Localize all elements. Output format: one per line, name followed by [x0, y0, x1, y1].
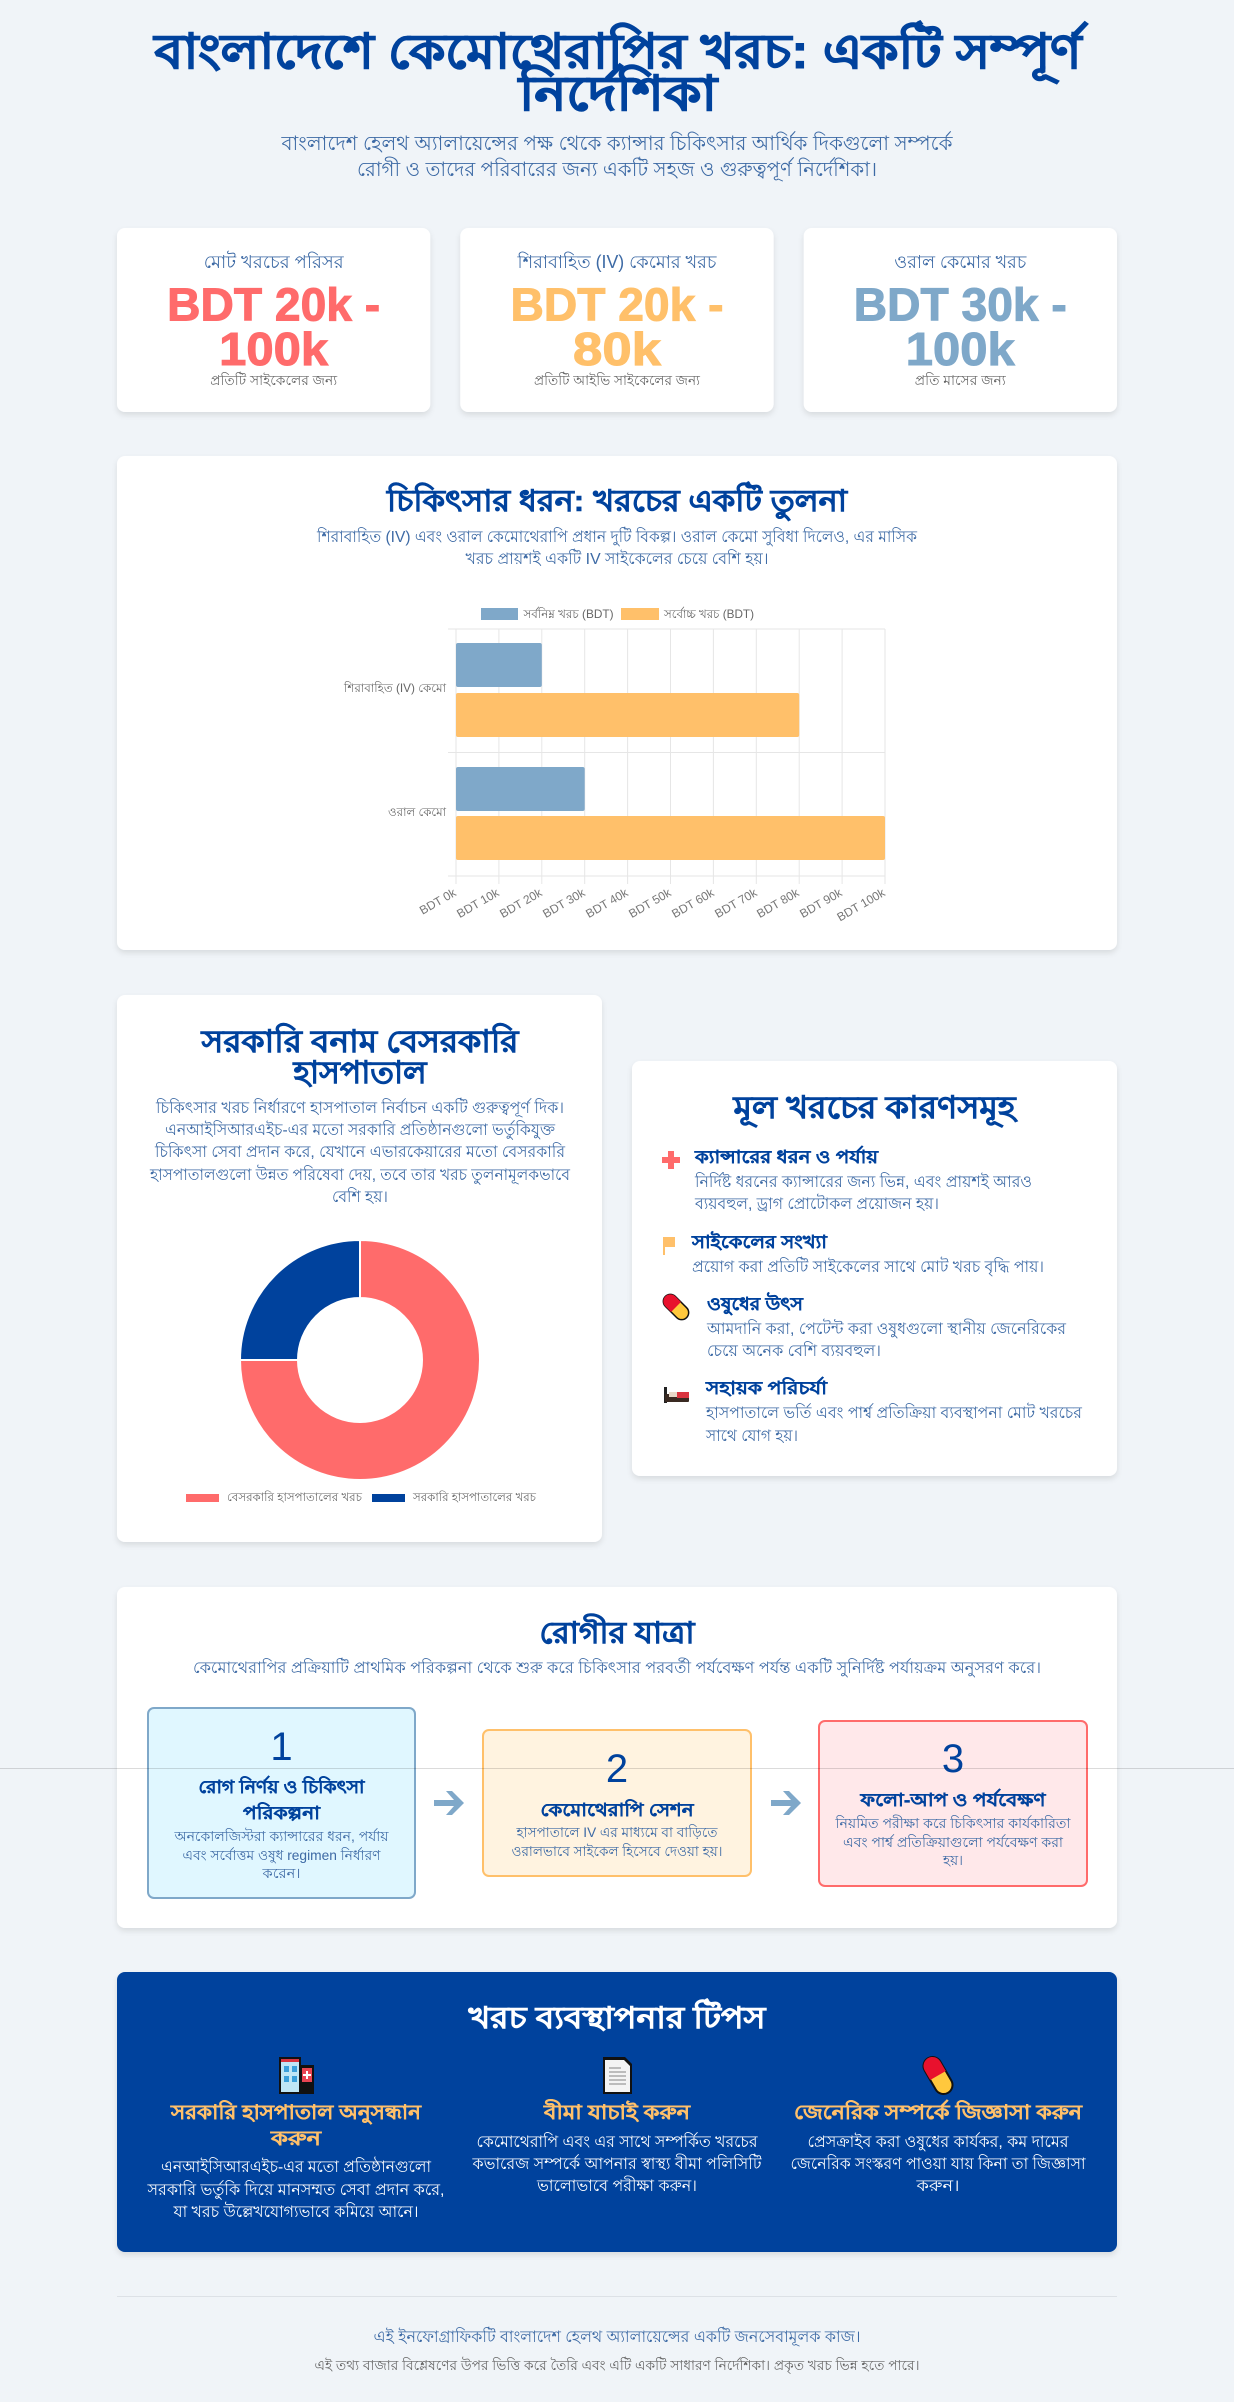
bar chart: [343, 607, 888, 924]
panel: IV cost stat: BDT 20k -: [510, 278, 724, 330]
item: drug source: আমদানি করা, পেটেন্ট করা ওষুধগুলো স্থানীয় জেনেরিকের: [706, 1319, 1067, 1338]
tip: insurance: কেমোথেরাপি এবং এর সাথে সম্পর্কিত খরচের: [476, 2132, 759, 2151]
tip: insurance: [472, 2057, 762, 2195]
step 3: 3: [942, 1737, 964, 1781]
text: hospital intro: বেশি হয়।: [332, 1187, 388, 1206]
heading: public vs private: সরকারি বনাম বেসরকারি: [200, 1022, 520, 1059]
tip: public hospital: যা খরচ উল্লেখযোগ্যভাবে কমিয়ে আনে।: [173, 2202, 418, 2221]
heading: tips: খরচ ব্যবস্থাপনার টিপস: [467, 1998, 767, 2035]
panel: key cost drivers: [632, 1061, 1117, 1476]
axis labels: BDT 90k: [797, 885, 845, 921]
step 1: রোগ নির্ণয় ও চিকিৎসা: [198, 1775, 365, 1797]
text: comparison intro: শিরাবাহিত (IV) এবং ওরাল কেমোথেরাপি প্রধান দুটি বিকল্প। ওরাল কেমো সুবিধা দিলেও, এর মাসিক: [316, 527, 918, 546]
step 1: পরিকল্পনা: [243, 1802, 321, 1823]
step 1: এবং সর্বোত্তম ওষুধ regimen নির্ধারণ: [182, 1847, 381, 1863]
item: cancer type: [662, 1145, 1032, 1213]
step 3: হয়।: [942, 1852, 963, 1868]
axis labels: BDT 10k: [454, 885, 502, 921]
legend: [481, 607, 754, 621]
panel: IV cost stat: [460, 228, 774, 412]
axis labels: ওরাল কেমো: [388, 805, 447, 819]
arrow: [771, 1791, 801, 1815]
step 3: নিয়মিত পরীক্ষা করে চিকিৎসার কার্যকারিতা: [834, 1815, 1071, 1831]
axis labels: BDT 0k: [417, 885, 459, 917]
step 1: 1: [270, 1725, 293, 1769]
axis labels: BDT 70k: [712, 885, 760, 921]
item: supportive care: [664, 1376, 1083, 1445]
step 1: অনকোলজিস্টরা ক্যান্সারের ধরন, পর্যায়: [174, 1828, 389, 1844]
item: drug source: ওষুধের উৎস: [707, 1292, 804, 1315]
text: hospital intro: এনআইসিআরএইচ-এর মতো সরকারি প্রতিষ্ঠানগুলো ভর্তুকিযুক্ত: [165, 1120, 555, 1140]
panel: oral cost stat: 100k: [906, 323, 1015, 375]
footer: এই তথ্য বাজার বিশ্লেষণের উপর ভিত্তি করে তৈরি এবং এটি একটি সাধারণ নির্দেশিকা। প্রকৃত খরচ ভিন্ন হতে পারে।: [314, 2357, 920, 2374]
item: cycles: প্রয়োগ করা প্রতিটি সাইকেলের সাথে মোট খরচ বৃদ্ধি পায়।: [692, 1257, 1044, 1277]
footer: এই ইনফোগ্রাফিকটি বাংলাদেশ হেলথ অ্যালায়েন্সের একটি জনসেবামূলক কাজ।: [374, 2327, 860, 2347]
legend: সর্বোচ্চ খরচ (BDT): [663, 607, 754, 621]
panel: oral cost stat: [804, 228, 1117, 412]
item: cycles: সাইকেলের সংখ্যা: [691, 1231, 828, 1252]
step 1: করেন।: [261, 1865, 300, 1881]
footer: [314, 2327, 920, 2374]
heading: key cost drivers: মূল খরচের কারণসমূহ: [732, 1090, 1018, 1128]
donut chart: [240, 1240, 480, 1480]
legend: বেসরকারি হাসপাতালের খরচ: [227, 1490, 363, 1504]
axis labels: BDT 60k: [669, 885, 717, 921]
text: hospital intro: [149, 1098, 571, 1206]
legend: [186, 1490, 537, 1504]
panel: patient journey: [117, 1587, 1117, 1928]
panel: oral cost stat: BDT 30k -: [854, 278, 1067, 330]
tip: insurance: বীমা যাচাই করুন: [543, 2099, 691, 2124]
panel: treatment comparison: [117, 456, 1117, 950]
panel: total cost stat: 100k: [219, 323, 329, 375]
step 3: [819, 1721, 1087, 1886]
tip: public hospital: এনআইসিআরএইচ-এর মতো প্রতিষ্ঠানগুলো: [161, 2157, 431, 2176]
panel: total cost stat: [117, 228, 430, 412]
item: supportive care: সহায়ক পরিচর্যা: [705, 1376, 828, 1398]
text: comparison intro: খরচ প্রায়শই একটি IV সাইকেলের চেয়ে বেশি হয়।: [466, 549, 768, 568]
text: hospital intro: চিকিৎসা সেবা প্রদান করে, যেখানে এভারকেয়ারের মতো বেসরকারি: [154, 1142, 566, 1161]
step 2: কেমোথেরাপি সেশন: [540, 1799, 695, 1820]
item: drug source: [660, 1291, 1067, 1360]
tip: generics: জেনেরিক সম্পর্কে জিজ্ঞাসা করুন: [794, 2099, 1083, 2124]
tip: public hospital: করুন: [270, 2128, 322, 2150]
panel: total cost stat: প্রতিটি সাইকেলের জন্য: [210, 372, 338, 388]
item: cancer type: ক্যান্সারের ধরন ও পর্যায়: [694, 1145, 880, 1167]
item: cycles: [663, 1231, 1044, 1277]
step 1: [148, 1708, 415, 1898]
axis labels: [343, 681, 888, 924]
panel: total cost stat: মোট খরচের পরিসর: [204, 251, 345, 272]
panel: public vs private: [117, 995, 602, 1542]
arrow: [434, 1791, 464, 1815]
axis labels: BDT 80k: [754, 885, 802, 921]
item: drug source: চেয়ে অনেক বেশি ব্যয়বহুল।: [707, 1341, 881, 1360]
item: cancer type: নির্দিষ্ট ধরনের ক্যান্সারের জন্য ভিন্ন, এবং প্রায়শই আরও: [694, 1172, 1032, 1191]
subtitle: বাংলাদেশ হেলথ অ্যালায়েন্সের পক্ষ থেকে ক্যান্সার চিকিৎসার আর্থিক দিকগুলো সম্পর্কে: [281, 131, 953, 155]
subtitle: রোগী ও তাদের পরিবারের জন্য একটি সহজ ও গুরুত্বপূর্ণ নির্দেশিকা।: [357, 157, 877, 181]
axis labels: শিরাবাহিত (IV) কেমো: [343, 681, 447, 695]
axis labels: BDT 20k: [497, 885, 545, 921]
panel: IV cost stat: 80k: [573, 323, 661, 375]
panel: oral cost stat: ওরাল কেমোর খরচ: [894, 252, 1027, 272]
tip: public hospital: [147, 2057, 444, 2221]
step 3: এবং পার্শ্ব প্রতিক্রিয়াগুলো পর্যবেক্ষণ করা: [843, 1834, 1064, 1850]
title: বাংলাদেশে কেমোথেরাপির খরচ: একটি সম্পূর্ণ: [152, 20, 1089, 84]
panel: IV cost stat: শিরাবাহিত (IV) কেমোর খরচ: [517, 252, 717, 272]
text: comparison intro: [316, 527, 918, 568]
step 2: [483, 1730, 751, 1876]
tip: generics: করুন।: [915, 2178, 960, 2195]
axis labels: BDT 30k: [540, 885, 588, 921]
subtitle: [281, 131, 953, 181]
axis labels: BDT 100k: [834, 885, 888, 924]
axis labels: BDT 40k: [583, 885, 631, 921]
tip: public hospital: সরকারি ভর্তুকি দিয়ে মানসম্মত সেবা প্রদান করে,: [147, 2180, 444, 2200]
heading: treatment comparison: চিকিৎসার ধরন: খরচের একটি তুলনা: [386, 481, 848, 521]
panel: total cost stat: BDT 20k -: [167, 278, 380, 330]
heading: public vs private: [200, 1022, 520, 1090]
title: [152, 20, 1089, 121]
tip: generics: [790, 2054, 1086, 2195]
text: journey intro: কেমোথেরাপির প্রক্রিয়াটি প্রাথমিক পরিকল্পনা থেকে শুরু করে চিকিৎসার পরবর্তী পর্যবেক্ষণ পর্যন্ত একটি সুনির্দিষ্ট পর্যায়ক্রম অনুসরণ করে।: [193, 1658, 1041, 1677]
text: hospital intro: হাসপাতালগুলো উন্নত পরিষেবা দেয়, তবে তার খরচ তুলনামূলকভাবে: [149, 1165, 571, 1185]
item: supportive care: সাথে যোগ হয়।: [705, 1428, 798, 1445]
tip: insurance: কভারেজ সম্পর্কে আপনার স্বাস্থ্য বীমা পলিসিটি: [472, 2154, 762, 2173]
panel: IV cost stat: প্রতিটি আইভি সাইকেলের জন্য: [534, 372, 701, 388]
step 2: ওরালভাবে সাইকেল হিসেবে দেওয়া হয়।: [512, 1843, 722, 1859]
panel: oral cost stat: প্রতি মাসের জন্য: [915, 372, 1007, 388]
tip: generics: জেনেরিক সংস্করণ পাওয়া যায় কিনা তা জিজ্ঞাসা: [790, 2154, 1086, 2173]
heading: patient journey: রোগীর যাত্রা: [540, 1613, 696, 1650]
title: নির্দেশিকা: [517, 63, 719, 121]
axis labels: BDT 50k: [626, 885, 674, 921]
tip: generics: প্রেসক্রাইব করা ওষুধের কার্যকর, কম দামের: [808, 2132, 1070, 2151]
item: cancer type: ব্যয়বহুল, ড্রাগ প্রোটোকল প্রয়োজন হয়।: [694, 1194, 939, 1213]
legend: সর্বনিম্ন খরচ (BDT): [523, 607, 614, 621]
legend: সরকারি হাসপাতালের খরচ: [412, 1490, 537, 1504]
heading: public vs private: হাসপাতাল: [292, 1055, 428, 1090]
step 2: 2: [606, 1747, 628, 1791]
tip: insurance: ভালোভাবে পরীক্ষা করুন।: [536, 2176, 697, 2195]
step 3: ফলো-আপ ও পর্যবেক্ষণ: [859, 1788, 1047, 1810]
step 2: হাসপাতালে IV এর মাধ্যমে বা বাড়িতে: [516, 1824, 718, 1840]
item: supportive care: হাসপাতালে ভর্তি এবং পার্শ্ব প্রতিক্রিয়া ব্যবস্থাপনা মোট খরচের: [705, 1403, 1083, 1422]
panel: cost management tips: [117, 1972, 1117, 2252]
tip: public hospital: সরকারি হাসপাতাল অনুসন্ধান: [170, 2100, 422, 2125]
text: hospital intro: চিকিৎসার খরচ নির্ধারণে হাসপাতাল নির্বাচন একটি গুরুত্বপূর্ণ দিক।: [155, 1098, 564, 1118]
